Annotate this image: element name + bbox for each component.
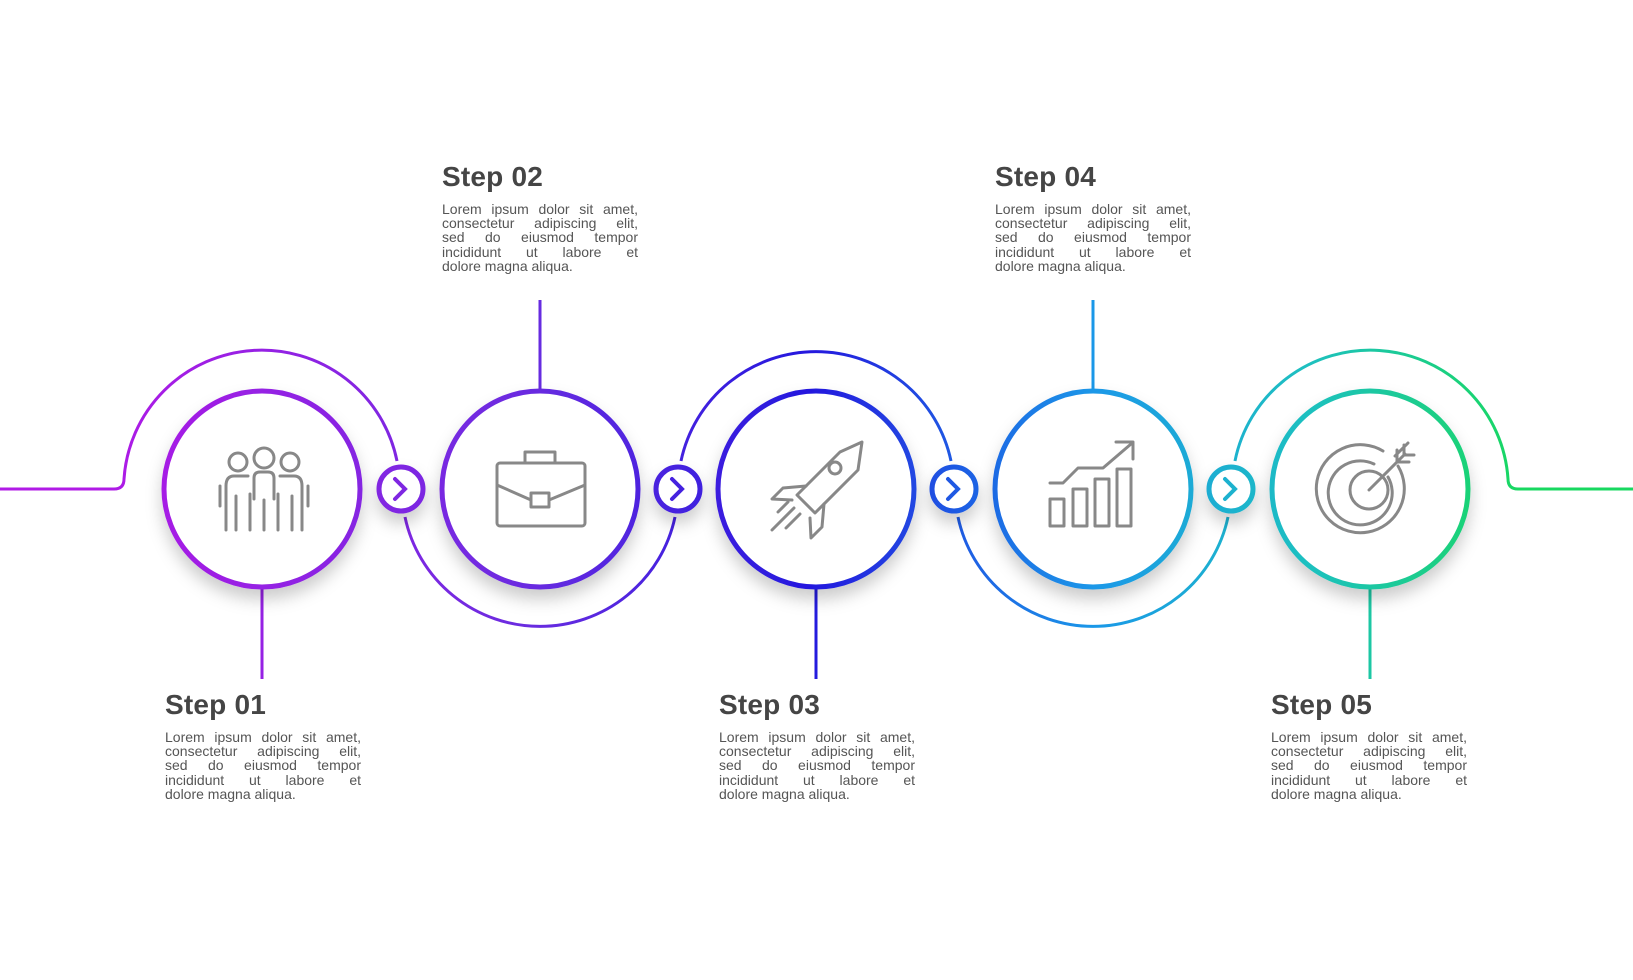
icon: chart bbox=[1050, 442, 1133, 526]
text: step 04: Step 04 bbox=[995, 161, 1096, 192]
icon: rocket bbox=[772, 442, 862, 538]
arrow: 3 bbox=[932, 467, 976, 511]
text: step 02: sed do eiusmod tempor bbox=[442, 229, 638, 245]
text: step 03: Lorem ipsum dolor sit amet, bbox=[719, 729, 915, 745]
icon: target bbox=[1316, 443, 1414, 533]
text: step 02: incididunt ut labore et bbox=[442, 244, 638, 260]
text: step 05 bbox=[1271, 689, 1467, 802]
text: step 05: incididunt ut labore et bbox=[1271, 772, 1467, 788]
text: step 03: incididunt ut labore et bbox=[719, 772, 915, 788]
text: step 04: Lorem ipsum dolor sit amet, bbox=[995, 201, 1191, 217]
text: step 03: dolore magna aliqua. bbox=[719, 786, 850, 802]
text: step 02: dolore magna aliqua. bbox=[442, 258, 573, 274]
text: step 03: sed do eiusmod tempor bbox=[719, 757, 915, 773]
circle: step 4 bbox=[995, 391, 1191, 587]
text: step 01: dolore magna aliqua. bbox=[165, 786, 296, 802]
text: step 03: consectetur adipiscing elit, bbox=[719, 743, 915, 759]
text: step 01: incididunt ut labore et bbox=[165, 772, 361, 788]
text: step 04: dolore magna aliqua. bbox=[995, 258, 1126, 274]
text: step 05: sed do eiusmod tempor bbox=[1271, 757, 1467, 773]
text: step 02: consectetur adipiscing elit, bbox=[442, 215, 638, 231]
text: step 01: Lorem ipsum dolor sit amet, bbox=[165, 729, 361, 745]
circle: step 2 bbox=[442, 391, 638, 587]
text: step 05: dolore magna aliqua. bbox=[1271, 786, 1402, 802]
text: step 02: Step 02 bbox=[442, 161, 543, 192]
timeline path bbox=[0, 300, 1633, 679]
text: step 02: Lorem ipsum dolor sit amet, bbox=[442, 201, 638, 217]
arrow: 2 bbox=[656, 467, 700, 511]
text: step 05: consectetur adipiscing elit, bbox=[1271, 743, 1467, 759]
arrow: 4 bbox=[1209, 467, 1253, 511]
text: step 01 bbox=[165, 689, 361, 802]
text: step 01: Step 01 bbox=[165, 689, 266, 720]
arrow: 1 bbox=[379, 467, 423, 511]
text: step 01: sed do eiusmod tempor bbox=[165, 757, 361, 773]
text: step 03: Step 03 bbox=[719, 689, 820, 720]
circle: step 5 bbox=[1272, 391, 1468, 587]
text: step 04: consectetur adipiscing elit, bbox=[995, 215, 1191, 231]
circle: step 3 bbox=[718, 391, 914, 587]
text: step 04 bbox=[995, 161, 1191, 274]
icon: briefcase bbox=[497, 452, 585, 526]
icon: people bbox=[220, 448, 308, 530]
text: step 04: sed do eiusmod tempor bbox=[995, 229, 1191, 245]
text: step 02 bbox=[442, 161, 638, 274]
text: step 04: incididunt ut labore et bbox=[995, 244, 1191, 260]
text: step 01: consectetur adipiscing elit, bbox=[165, 743, 361, 759]
text: step 03 bbox=[719, 689, 915, 802]
text: step 05: Step 05 bbox=[1271, 689, 1372, 720]
circle: step 1 bbox=[164, 391, 360, 587]
text: step 05: Lorem ipsum dolor sit amet, bbox=[1271, 729, 1467, 745]
